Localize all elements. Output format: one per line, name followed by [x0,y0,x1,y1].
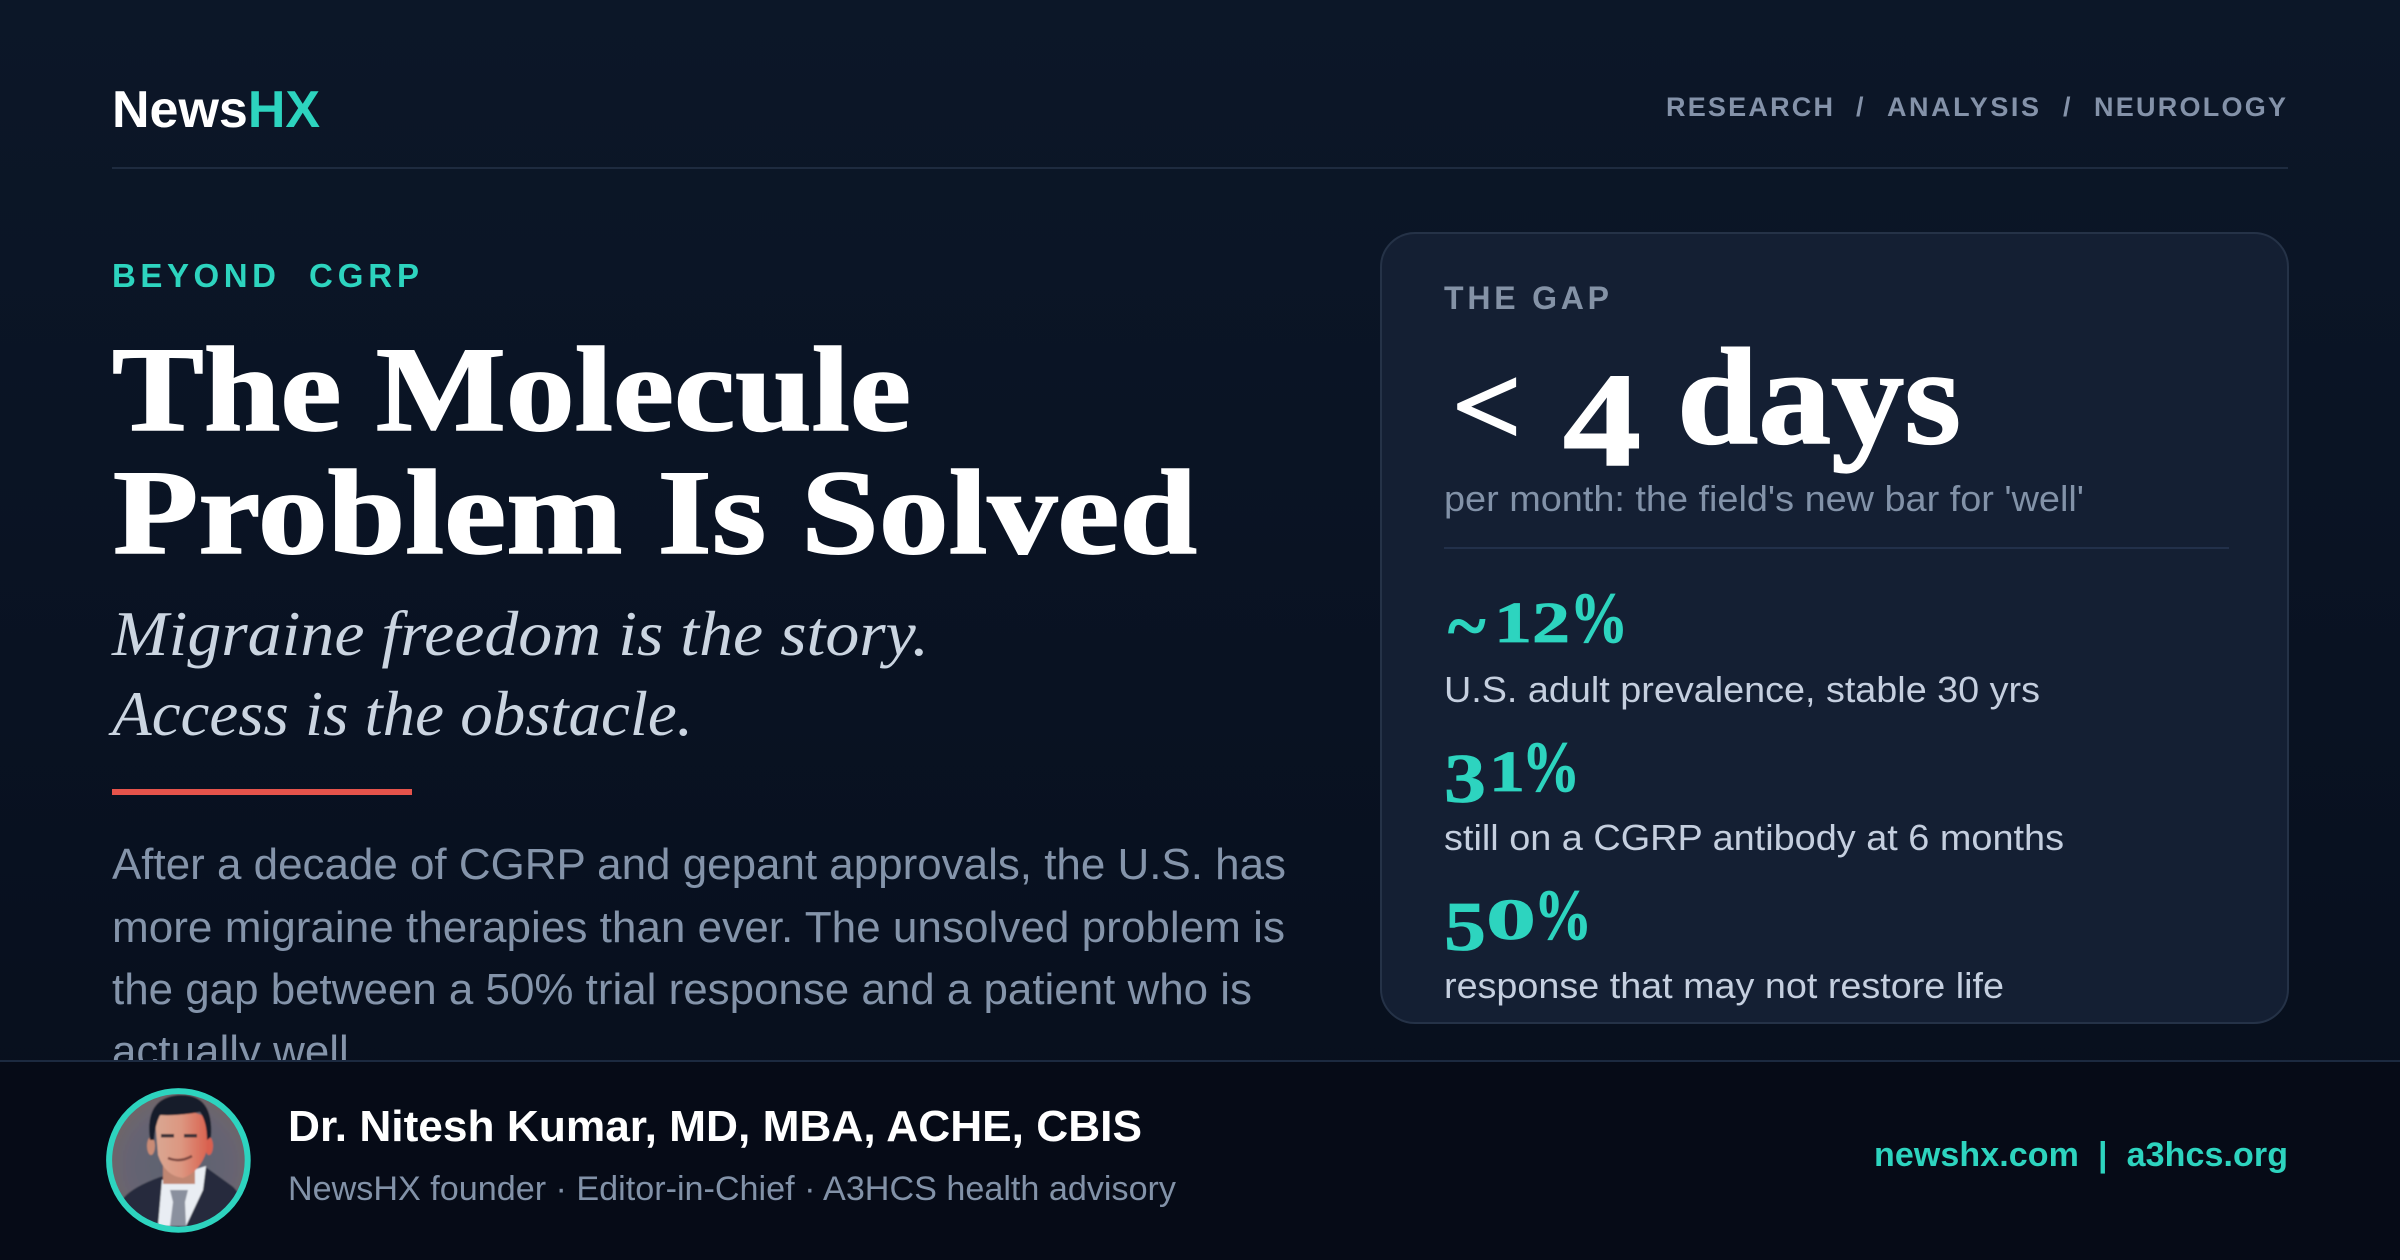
section navigation: / [1856,92,1864,122]
body paragraph: actually well. [112,1027,361,1076]
footer [0,1060,2400,1233]
body paragraph: After a decade of CGRP and gepant approvals, the U.S. has [112,840,1286,889]
section navigation: ANALYSIS [1887,92,2039,122]
eyebrow: CGRP [309,257,419,294]
headline stat: days [1677,320,1961,473]
stat: persistence [1444,727,2064,858]
title: The Molecule [112,323,911,457]
stat: response: 0 [1486,887,1536,952]
panel: the gap [1381,233,2288,1023]
body paragraph [112,848,1284,1060]
stat: response: % [1534,875,1592,955]
subtitle: Migraine freedom is the story. [111,599,929,669]
stat: prevalence: % [1570,578,1628,658]
subtitle: Access is the obstacle. [108,679,693,749]
author portrait [106,1088,251,1233]
stat: prevalence [1444,578,2040,710]
headline stat caption: per month: the field's new bar for 'well' [1444,478,2084,519]
section navigation: RESEARCH [1666,92,1833,122]
headline stat: 4 [1563,346,1641,494]
panel heading: THE GAP [1444,280,1609,316]
stat: prevalence: U.S. adult prevalence, stable 30 yrs [1444,669,2040,710]
logo: NewsHX [112,81,320,139]
stat: persistence: 3 [1444,741,1486,818]
section navigation: / [2063,92,2071,122]
header [112,81,2286,139]
body paragraph: the gap between a 50% trial response and a patient who is [112,965,1252,1014]
eyebrow: BEYOND [112,257,276,294]
stat: response [1444,875,2004,1006]
stat: persistence: 1 [1489,739,1525,804]
stat: persistence: % [1522,727,1580,807]
body paragraph: more migraine therapies than ever. The unsolved problem is [112,903,1285,952]
stat: prevalence: 12 [1494,590,1570,655]
section navigation: NEUROLOGY [2094,92,2286,122]
stat: prevalence: ~ [1448,586,1485,666]
title: Problem Is Solved [113,446,1197,580]
author role: NewsHX founder · Editor-in-Chief · A3HCS health advisory [288,1170,1176,1208]
red accent bar [112,789,412,795]
stat: response: 5 [1444,889,1486,966]
website links: newshx.com | a3hcs.org [1874,1136,2288,1174]
subtitle [108,599,929,749]
author name: Dr. Nitesh Kumar, MD, MBA, ACHE, CBIS [288,1102,1142,1151]
headline stat: < [1452,345,1522,469]
stat: response: response that may not restore life [1444,965,2004,1006]
title [112,323,1197,580]
stat: persistence: still on a CGRP antibody at 6 months [1444,817,2064,858]
